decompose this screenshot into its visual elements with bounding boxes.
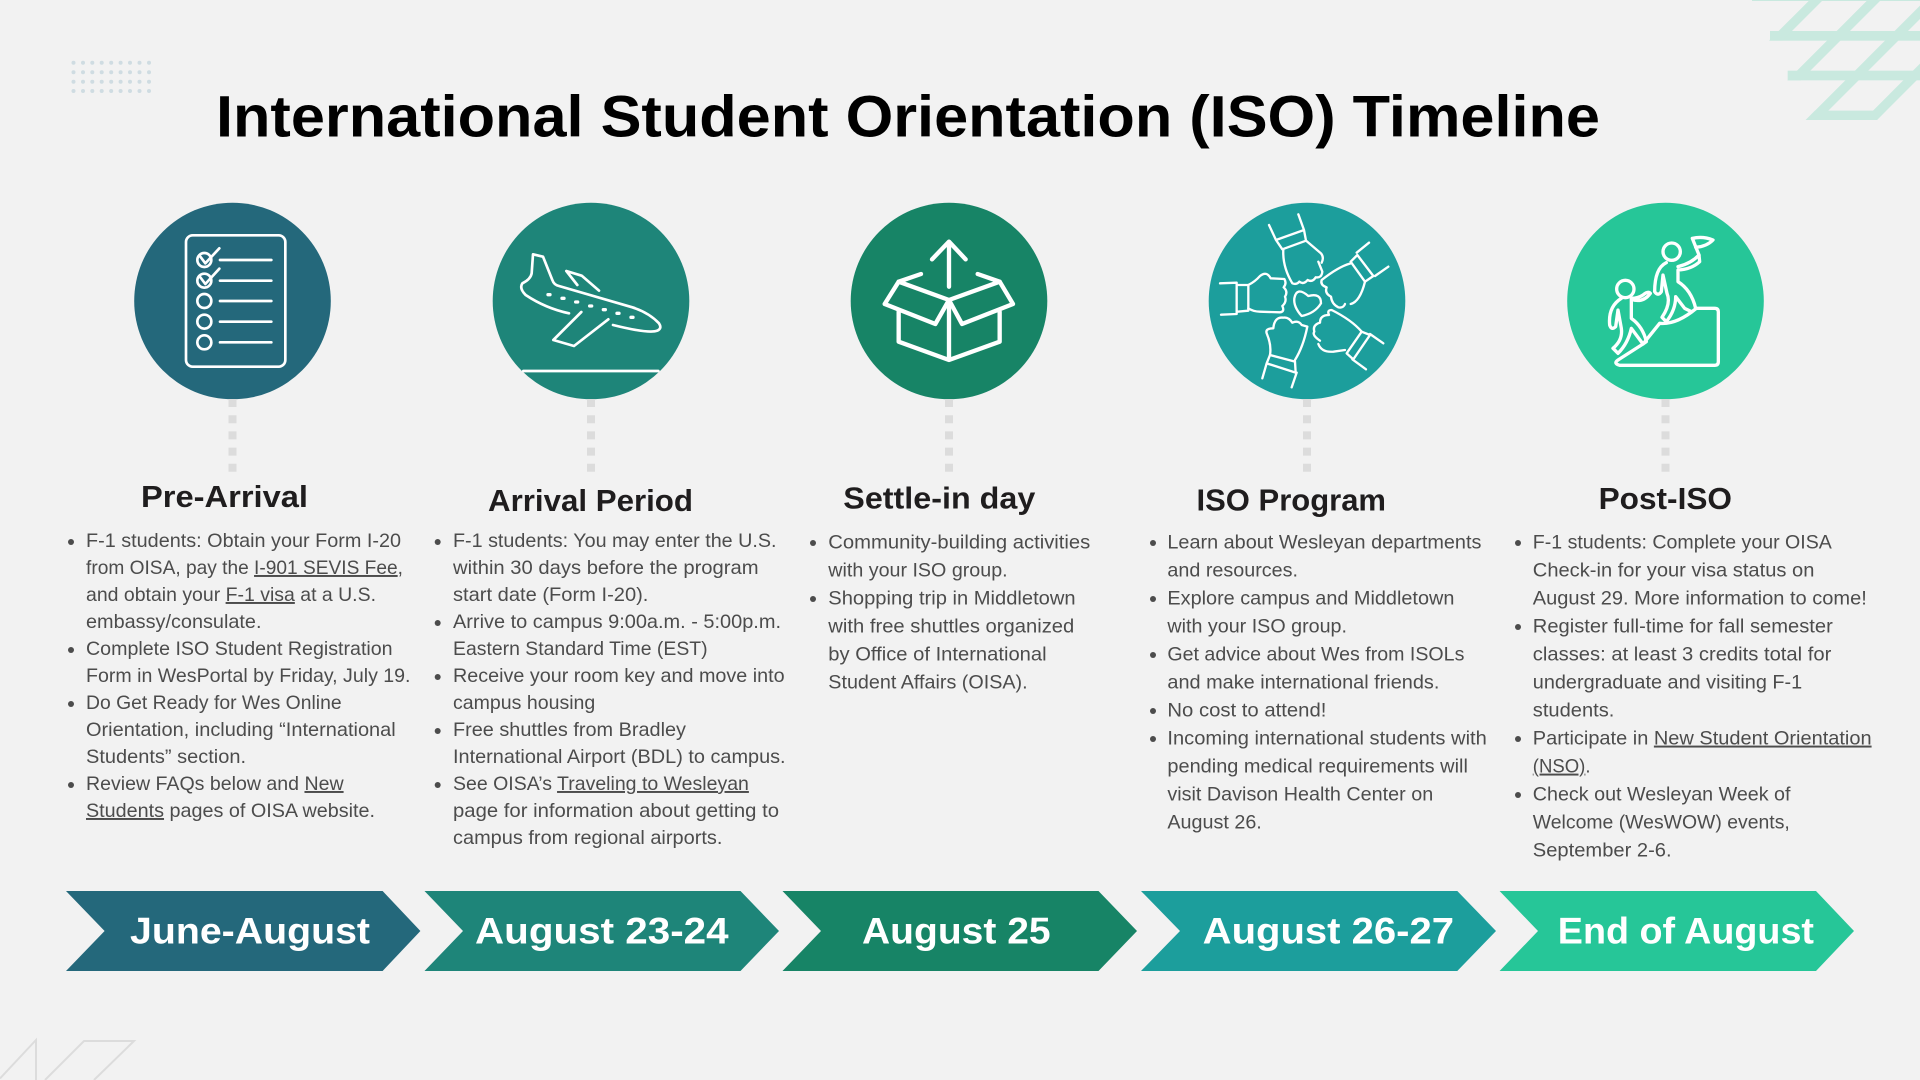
bullet list: Pre-Arrival: Form in WesPortal by Friday, July 19.: [86, 665, 411, 687]
bullet list: Post-ISO: F-1 students: Complete your OISA: [1533, 532, 1832, 554]
bullet list: Arrival Period: campus from regional airports.: [453, 827, 722, 849]
bullet list: Post-ISO: (NSO).: [1533, 756, 1590, 778]
date arrow: August 25: August 25: [862, 910, 1051, 952]
title: International Student Orientation (ISO) Timeline: [216, 85, 1600, 150]
bullet list: Settle-in day: [810, 531, 1091, 693]
date arrow: June-August: [66, 891, 420, 971]
bullet list: Settle-in day: by Office of International: [828, 643, 1047, 665]
connector: dotted line: [1303, 399, 1311, 472]
date arrow: End of August: [1500, 891, 1854, 971]
bullet list: Post-ISO: August 29. More information to come!: [1533, 588, 1867, 610]
bullet list: Arrival Period: Free shuttles from Bradley: [453, 719, 686, 741]
heading: Post-ISO: Post-ISO: [1599, 481, 1732, 516]
bullet list: Arrival Period: campus housing: [453, 692, 595, 714]
bullet list: ISO Program: visit Davison Health Center on: [1167, 784, 1433, 806]
bullet list: Arrival Period: within 30 days before the program: [452, 557, 759, 579]
decoration: top-right lattice: [1752, 0, 1920, 120]
bullet list: Arrival Period: start date (Form I-20).: [453, 584, 648, 606]
bullet list: Pre-Arrival: Orientation, including “International: [86, 719, 396, 741]
bullet list: Pre-Arrival: Students” section.: [86, 746, 246, 768]
bullet list: Pre-Arrival: embassy/consulate.: [86, 611, 262, 633]
bullet list: ISO Program: Explore campus and Middletown: [1167, 588, 1454, 610]
bullet list: Post-ISO: classes: at least 3 credits total for: [1533, 644, 1832, 666]
connector: dotted line: [1662, 399, 1670, 472]
icon: checklist: [134, 203, 331, 399]
bullet list: ISO Program: Incoming international students with: [1167, 728, 1487, 750]
bullet list: Post-ISO: undergraduate and visiting F-1: [1533, 672, 1802, 694]
bullet list: Pre-Arrival: Complete ISO Student Registration: [86, 638, 393, 660]
bullet list: ISO Program: with your ISO group.: [1166, 616, 1347, 638]
panel: ISO Program: [1141, 203, 1496, 971]
bullet list: Post-ISO: Welcome (WesWOW) events,: [1533, 812, 1790, 834]
bullet list: Arrival Period: F-1 students: You may enter the U.S.: [453, 530, 776, 552]
bullet list: Arrival Period: See OISA’s Traveling to Wesleyan: [453, 773, 749, 795]
decoration: dot grid: [72, 61, 151, 93]
bullet list: Post-ISO: Participate in New Student Orientation: [1533, 728, 1872, 750]
icon: hands in a circle around a heart: [1209, 203, 1405, 399]
bullet list: Pre-Arrival: [68, 530, 411, 822]
bullet list: Settle-in day: with your ISO group.: [827, 559, 1008, 581]
bullet list: Pre-Arrival: Students pages of OISA website.: [86, 800, 375, 822]
connector: dotted line: [945, 399, 953, 472]
panel: Post-ISO: [1500, 203, 1872, 971]
bullet list: Arrival Period: Eastern Standard Time (EST): [453, 638, 708, 660]
bullet list: Post-ISO: Check-in for your visa status on: [1533, 560, 1814, 582]
heading: Settle-in day: Settle-in day: [843, 480, 1036, 515]
date arrow: August 26-27: August 26-27: [1203, 910, 1454, 952]
bullet list: Settle-in day: Student Affairs (OISA).: [828, 671, 1028, 693]
bullet list: ISO Program: No cost to attend!: [1167, 700, 1326, 722]
bullet list: Pre-Arrival: Review FAQs below and New: [86, 773, 345, 795]
bullet list: ISO Program: and resources.: [1167, 560, 1298, 582]
icon: open box with arrow: [851, 203, 1047, 399]
date arrow: End of August: End of August: [1558, 910, 1814, 952]
bullet list: ISO Program: Get advice about Wes from ISOLs: [1167, 644, 1465, 666]
decoration: bottom-left outlines: [0, 1040, 134, 1080]
bullet list: Settle-in day: Community-building activities: [828, 531, 1091, 553]
bullet list: Arrival Period: [435, 530, 786, 849]
date arrow: August 23-24: August 23-24: [475, 910, 729, 952]
bullet list: Post-ISO: Register full-time for fall semester: [1533, 616, 1833, 638]
connector: dotted line: [228, 399, 236, 472]
bullet list: ISO Program: pending medical requirements will: [1167, 756, 1468, 778]
icon: airplane landing: [493, 203, 689, 399]
bullet list: Settle-in day: with free shuttles organized: [827, 615, 1074, 637]
bullet list: Post-ISO: September 2-6.: [1533, 840, 1672, 862]
bullet list: Pre-Arrival: from OISA, pay the I-901 SEVIS Fee,: [86, 557, 403, 579]
panel: Pre-Arrival: [66, 203, 420, 971]
panel: Settle-in day: [782, 203, 1137, 971]
bullet list: ISO Program: and make international friends.: [1167, 672, 1439, 694]
date arrow: August 23-24: [424, 891, 779, 971]
bullet list: Pre-Arrival: and obtain your F-1 visa at a U.S.: [86, 584, 376, 606]
bullet list: Post-ISO: Check out Wesleyan Week of: [1533, 784, 1791, 806]
heading: ISO Program: ISO Program: [1196, 482, 1386, 518]
date arrow: June-August: June-August: [130, 910, 370, 952]
connector: dotted line: [587, 399, 595, 472]
bullet list: Arrival Period: International Airport (BDL) to campus.: [453, 746, 786, 768]
icon: climbers with flag: [1567, 203, 1764, 399]
bullet list: Post-ISO: students.: [1533, 700, 1614, 722]
bullet list: ISO Program: Learn about Wesleyan departments: [1167, 532, 1482, 554]
bullet list: ISO Program: August 26.: [1167, 812, 1262, 834]
bullet list: Arrival Period: Receive your room key and move into: [453, 665, 785, 687]
heading: Pre-Arrival: Pre-Arrival: [141, 479, 308, 514]
bullet list: Post-ISO: [1515, 532, 1872, 862]
bullet list: Pre-Arrival: Do Get Ready for Wes Online: [86, 692, 342, 714]
date arrow: August 26-27: [1141, 891, 1496, 971]
bullet list: ISO Program: [1150, 532, 1487, 834]
bullet list: Arrival Period: Arrive to campus 9:00a.m. - 5:00p.m.: [453, 611, 781, 633]
heading: Arrival Period: Arrival Period: [488, 483, 693, 518]
bullet list: Pre-Arrival: F-1 students: Obtain your Form I-20: [86, 530, 401, 552]
bullet list: Settle-in day: Shopping trip in Middletown: [828, 587, 1076, 609]
date arrow: August 25: [782, 891, 1137, 971]
panel: Arrival Period: [424, 203, 786, 971]
bullet list: Arrival Period: page for information about getting to: [453, 800, 779, 822]
